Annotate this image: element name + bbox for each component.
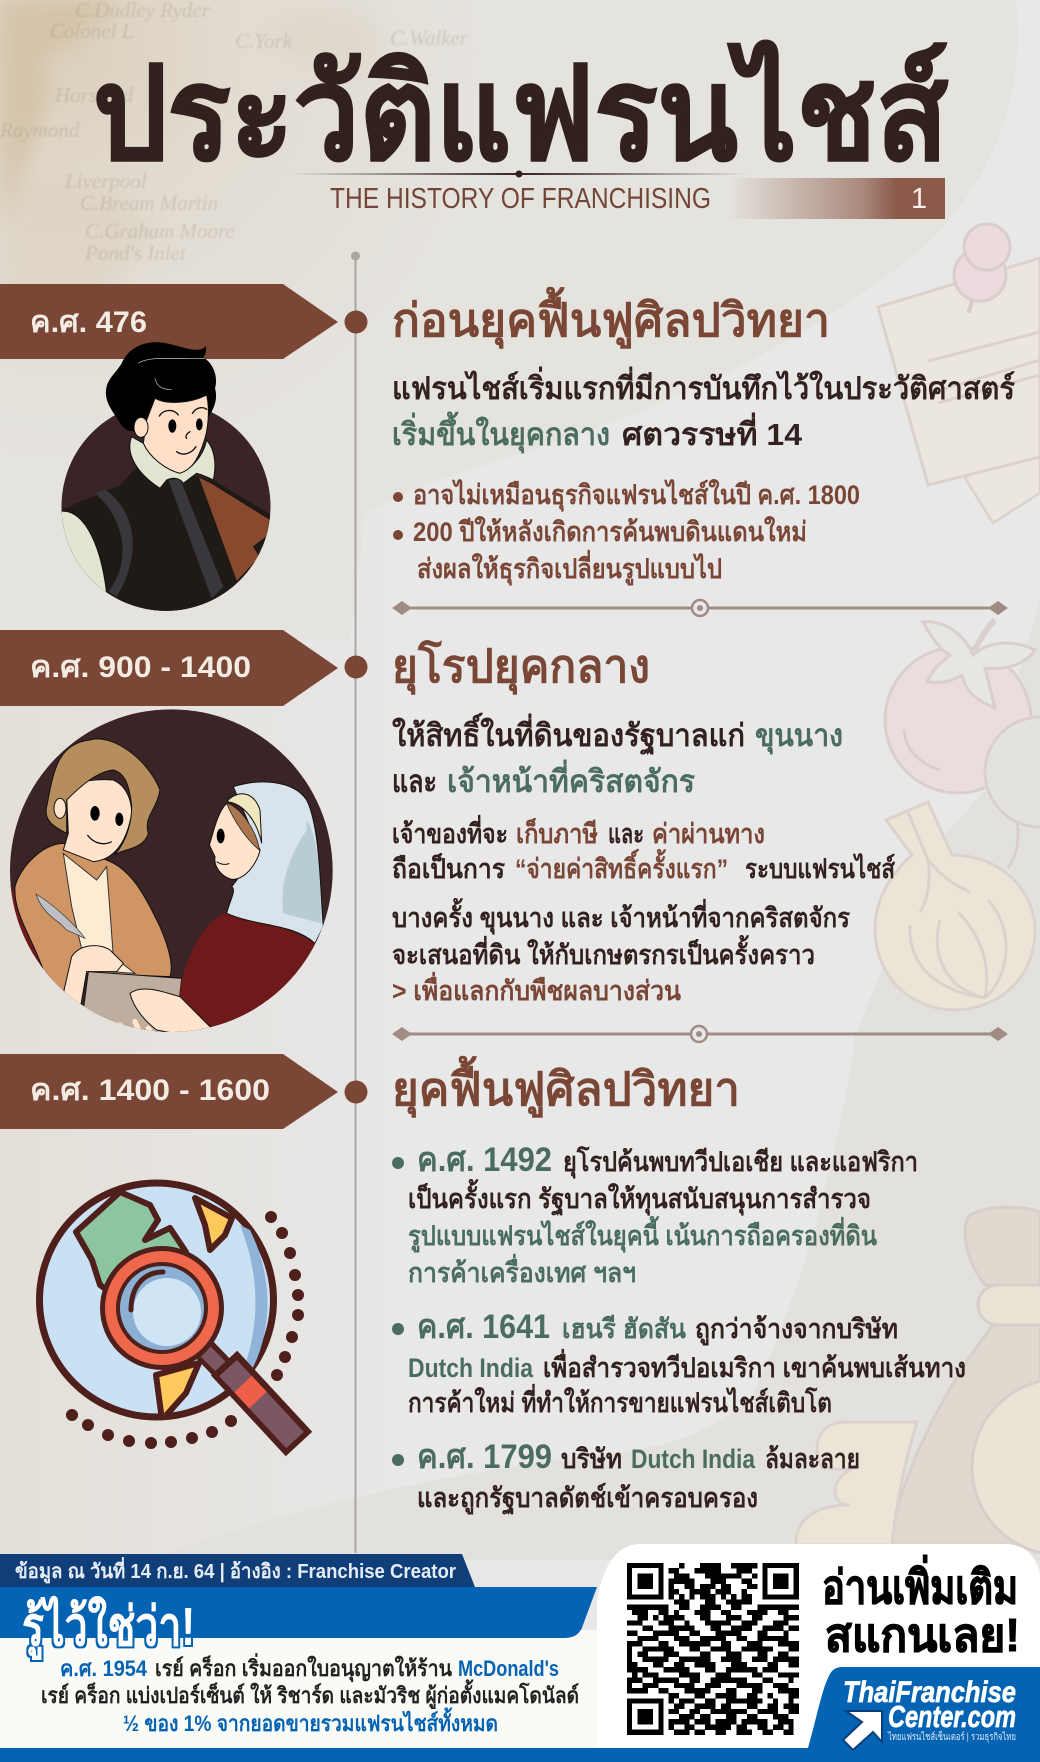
title underline ornament <box>290 170 750 178</box>
date tag 476: ค.ศ. 476 <box>30 306 147 339</box>
did-you-know text: เรย์ คร็อก เริ่มออกใบอนุญาตให้ร้าน <box>155 1652 452 1683</box>
bullet notes: ส่งผลให้ธุรกิจเปลี่ยนรูปแบบไป <box>417 549 722 586</box>
entry 1641: Dutch India <box>408 1353 534 1383</box>
portrait: landlord and woman <box>7 709 333 1043</box>
bullet notes <box>393 479 860 586</box>
heading: ก่อนยุคฟื้นฟูศิลปวิทยา <box>392 286 830 349</box>
date tag 476 <box>0 284 368 359</box>
entry 1492: เป็นครั้งแรก รัฐบาลให้ทุนสนับสนุนการสำรวจ <box>408 1178 871 1217</box>
body text: ค่าผ่านทาง <box>652 819 765 849</box>
icon: globe and magnifier <box>40 1183 304 1449</box>
lead text: เริ่มขึ้นในยุคกลาง <box>392 411 610 454</box>
body text: จะเสนอที่ดิน ให้กับเกษตรกรเป็นครั้งคราว <box>392 934 815 970</box>
heading: ยุโรปยุคกลาง <box>392 639 650 695</box>
entry 1641: การค้าใหม่ ที่ทำให้การขายแฟรนไชส์เติบโต <box>408 1383 832 1418</box>
scan call to action: สแกนเลย! <box>825 1609 1020 1661</box>
map place names texture: Raymond <box>0 118 80 142</box>
bullet notes: 200 ปีให้หลังเกิดการค้นพบดินแดนใหม่ <box>413 516 807 547</box>
panel: medieval Europe <box>0 630 1008 1043</box>
panel: before the Renaissance <box>0 284 1015 617</box>
date tag 1400-1600: ค.ศ. 1400 - 1600 <box>30 1074 270 1107</box>
subtitle bar: 1 <box>911 183 927 215</box>
lead text: เจ้าหน้าที่คริสตจักร <box>447 759 695 799</box>
background illustration: money bag and hand <box>796 1207 1040 1555</box>
body text <box>392 814 895 1006</box>
entry 1799: และถูกรัฐบาลดัตช์เข้าครอบครอง <box>417 1482 758 1516</box>
map place names texture: C.York <box>235 29 293 53</box>
entry 1799: บริษัท <box>561 1444 622 1474</box>
body text: เก็บภาษี <box>516 816 598 849</box>
panel: QR and logo <box>597 1544 1040 1750</box>
did-you-know text: ค.ศ. 1954 <box>60 1656 148 1681</box>
title: ประวัติแฟรนไชส์ <box>93 40 949 187</box>
map place names texture: Colonel L <box>50 19 133 43</box>
lead text: ขุนนาง <box>755 718 843 755</box>
map place names texture <box>0 0 469 265</box>
body text: “จ่ายค่าสิทธิ์ครั้งแรก” <box>515 848 728 884</box>
did-you-know text: ½ ของ 1% จากยอดขายรวมแฟรนไชส์ทั้งหมด <box>123 1707 498 1736</box>
subtitle: THE HISTORY OF FRANCHISING <box>330 183 711 215</box>
heading: ยุคฟื้นฟูศิลปวิทยา <box>392 1055 740 1118</box>
portrait: young man <box>53 342 280 617</box>
lead text: แฟรนไชส์เริ่มแรกที่มีการบันทึกไว้ในประวัติศาสตร์ <box>392 366 1015 406</box>
logo: ThaiFranchise Center <box>808 1667 1040 1750</box>
divider <box>392 1026 1008 1042</box>
scan call to action <box>822 1555 1020 1661</box>
did-you-know heading: รู้ไว้ใช่ว่า! <box>22 1595 195 1660</box>
entry 1492: ค.ศ. 1492 <box>417 1141 552 1179</box>
entry 1492: ยุโรปค้นพบทวีปเอเชีย และแอฟริกา <box>563 1145 918 1179</box>
icon: arrow <box>843 1711 882 1750</box>
body text: ถือเป็นการ <box>392 851 505 884</box>
body text: เจ้าของที่จะ <box>392 814 508 849</box>
entry 1641: ถูกว่าจ้างจากบริษัท <box>695 1314 898 1346</box>
divider <box>392 600 1008 616</box>
lead text <box>392 366 1015 454</box>
panel: Renaissance <box>0 1054 966 1516</box>
date tag 900-1400 <box>0 630 368 706</box>
background illustration: tomato and fruit <box>885 620 1040 868</box>
lead text: ให้สิทธิ์ในที่ดินของรัฐบาลแก่ <box>392 712 745 756</box>
entry 1641: เพื่อสำรวจทวีปอเมริกา เขาค้นพบเส้นทาง <box>543 1348 966 1383</box>
background illustration: pinned notes <box>878 224 1040 523</box>
date tag 900-1400: ค.ศ. 900 - 1400 <box>30 651 251 684</box>
entry 1492: การค้าเครื่องเทศ ฯลฯ <box>408 1253 636 1288</box>
map place names texture: C.Graham Moore <box>85 219 235 243</box>
map place names texture: C.Bream Martin <box>80 191 218 215</box>
bullet notes: อาจไม่เหมือนธุรกิจแฟรนไชส์ในปี ค.ศ. 1800 <box>413 479 860 512</box>
body text: ระบบแฟรนไชส์ <box>745 853 895 884</box>
lead text: และ <box>392 764 437 799</box>
body text: > เพื่อแลกกับพืชผลบางส่วน <box>392 971 681 1006</box>
map place names texture: C.Walker <box>390 26 469 50</box>
entry 1799: ล้มละลาย <box>765 1444 860 1474</box>
footer panel: did you know <box>0 1554 620 1750</box>
body text: บางครั้ง ขุนนาง และ เจ้าหน้าที่จากคริสตจักร <box>392 897 850 935</box>
entry 1641: ค.ศ. 1641 <box>417 1308 550 1346</box>
source tab: ข้อมูล ณ วันที่ 14 ก.ย. 64 | อ้างอิง : Franchise Creator <box>15 1556 456 1585</box>
map place names texture: Horstead <box>54 83 134 107</box>
lead text: ศตวรรษที่ 14 <box>622 412 803 452</box>
did-you-know text: เรย์ คร็อก แบ่งเปอร์เซ็นต์ ให้ ริชาร์ด และมัวริช ผู้ก่อตั้งแมคโดนัลด์ <box>41 1679 579 1710</box>
subtitle bar <box>700 178 945 219</box>
body text: และ <box>608 819 644 849</box>
did-you-know text: McDonald's <box>458 1656 559 1681</box>
entry 1799: ค.ศ. 1799 <box>417 1438 552 1476</box>
did-you-know text <box>41 1652 579 1736</box>
QR code <box>627 1563 799 1735</box>
source tab <box>0 1554 475 1587</box>
blue band <box>0 1587 597 1638</box>
entry 1492: รูปแบบแฟรนไชส์ในยุคนี้ เน้นการถือครองที่ดิน <box>408 1215 877 1253</box>
entry 1641: เฮนรี ฮัดสัน <box>562 1314 686 1344</box>
timeline <box>351 252 360 1553</box>
map place names texture: Pond's Inlet <box>84 241 187 265</box>
entry 1799 <box>392 1438 860 1516</box>
entry 1799: Dutch India <box>631 1444 756 1474</box>
bottom blue strip <box>0 1748 1040 1762</box>
date tag 1400-1600 <box>0 1054 368 1129</box>
entry 1492 <box>392 1141 918 1288</box>
entry 1641 <box>392 1308 966 1418</box>
background illustration: garlic <box>875 802 1035 1010</box>
lead text <box>392 712 843 799</box>
map place names texture: Liverpool <box>64 169 147 193</box>
